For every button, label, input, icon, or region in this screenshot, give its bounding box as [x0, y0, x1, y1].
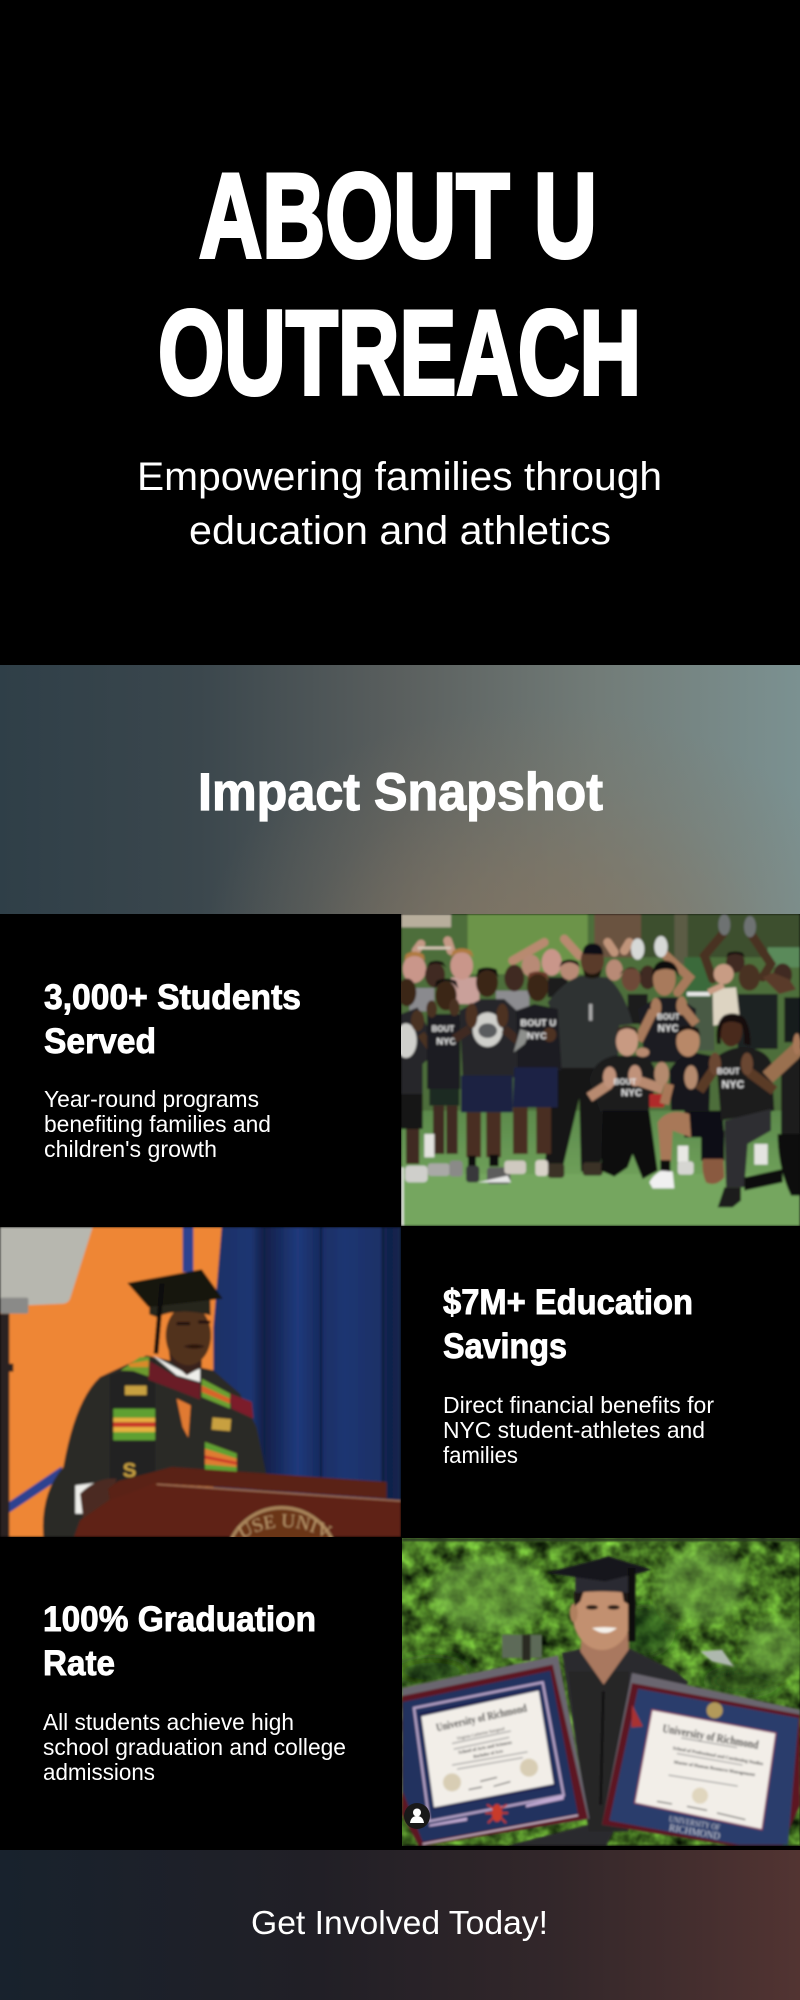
heading: graduation rate: Rate	[43, 1644, 115, 1683]
right side group	[738, 994, 778, 1049]
text: students served description: children's growth	[44, 1136, 217, 1162]
photo: team group on field: NYC	[527, 1031, 547, 1041]
panel: education savings text	[401, 1226, 800, 1538]
right diploma: UNIVERSITY OF	[668, 1813, 721, 1832]
heading: students served: 3,000+ Students	[44, 978, 301, 1017]
text: students served description: benefiting families and	[44, 1111, 271, 1137]
right diploma	[602, 1673, 800, 1846]
subtitle	[137, 455, 662, 553]
photo: team group on field: NYC	[621, 1088, 642, 1099]
subtitle: Empowering families through	[137, 455, 662, 499]
photo: team group on field: NYC	[658, 1023, 679, 1034]
front player 2	[427, 1014, 460, 1089]
title	[158, 149, 641, 420]
text: students served description: Year-round programs	[44, 1086, 259, 1112]
back row heads	[403, 949, 562, 983]
left diploma: Bachelor of Arts	[473, 1748, 504, 1759]
text: education savings description: Direct financial benefits for	[443, 1392, 714, 1418]
photo: graduate speaking at podium: S	[123, 1459, 136, 1482]
trees and field	[401, 914, 800, 1113]
text: graduation rate description: All students achieve high	[43, 1709, 294, 1735]
heading: graduation rate	[43, 1600, 316, 1683]
text: education savings description: families	[443, 1442, 518, 1468]
heading: education savings: Savings	[443, 1327, 567, 1366]
text: graduation rate description: school graduation and college	[43, 1734, 346, 1760]
hand	[75, 1483, 94, 1514]
photo: team group on field: NYC	[722, 1079, 744, 1091]
tie	[177, 1399, 191, 1438]
text: get involved: Get Involved Today!	[251, 1904, 548, 1941]
podium seal: USE UNIV	[238, 1512, 334, 1537]
text: education savings description: NYC student-athletes and	[443, 1417, 705, 1443]
right diploma: University of Richmond	[661, 1721, 760, 1752]
panel: impact snapshot band	[0, 665, 800, 914]
cap	[575, 1571, 629, 1593]
kneeling man 1	[589, 1056, 657, 1114]
left diploma: Virginia Catherine Sutrgood	[456, 1726, 506, 1741]
head	[572, 1590, 630, 1650]
photo: team group on field: BOUT U	[520, 1018, 556, 1028]
subtitle: education and athletics	[189, 509, 611, 553]
photo: team group on field	[395, 914, 800, 1226]
kneeling man 3	[716, 1047, 774, 1121]
mortarboard	[148, 1298, 212, 1318]
kente stole	[121, 1357, 149, 1376]
panel: graduation rate text	[0, 1537, 402, 1850]
podium seal	[228, 1504, 335, 1537]
tree tones	[392, 1548, 800, 1698]
right diploma: School of Professional and Continuing Studies	[672, 1746, 764, 1767]
gown	[499, 1648, 688, 1848]
neck and head	[168, 1347, 202, 1375]
icon: profile badge	[404, 1803, 430, 1829]
photo: team group on field: BOUT	[432, 1024, 454, 1033]
text: graduation rate description	[43, 1709, 346, 1785]
heading: impact snapshot: Impact Snapshot	[198, 763, 603, 822]
player centre back	[638, 997, 696, 1062]
heading: education savings	[443, 1283, 693, 1366]
hands	[402, 1741, 407, 1755]
photo: graduate with framed diplomas	[392, 1538, 800, 1848]
coach	[548, 976, 633, 1068]
text: students served description	[44, 1086, 271, 1162]
stole emblems	[125, 1386, 147, 1395]
text: education savings description	[443, 1392, 714, 1468]
front player 4	[516, 1004, 562, 1071]
kneeling man 2	[669, 1052, 711, 1111]
neck	[580, 1633, 629, 1685]
title: ABOUT U	[199, 149, 597, 283]
gloves	[631, 936, 668, 960]
photo: team group on field: BOUT	[614, 1078, 636, 1087]
panel: call to action footer	[0, 1850, 800, 2000]
left diploma: University of Richmond	[435, 1702, 529, 1734]
heading: education savings: $7M+ Education	[443, 1283, 693, 1322]
photo: team group on field: NYC	[436, 1037, 456, 1047]
raised arms back row	[416, 934, 771, 992]
heading: graduation rate: 100% Graduation	[43, 1600, 316, 1639]
photo: team group on field: BOUT	[717, 1067, 740, 1076]
hood	[148, 1360, 200, 1400]
panel: hero	[0, 0, 800, 665]
photo: team group on field: BOUT	[657, 1012, 680, 1021]
right diploma: RICHMOND	[668, 1823, 721, 1843]
left diploma	[402, 1655, 589, 1846]
right edge man	[781, 1047, 800, 1134]
photo: graduate speaking at podium	[0, 1227, 401, 1537]
gown	[43, 1355, 267, 1537]
panel: students served text	[0, 914, 401, 1226]
front player 1	[401, 1006, 429, 1096]
baby	[713, 987, 740, 1026]
heading: students served: Served	[44, 1022, 156, 1061]
text: graduation rate description: admissions	[43, 1759, 155, 1785]
podium	[108, 1467, 387, 1500]
back row bodies	[409, 988, 434, 1011]
right diploma: Master of Human Resource Management	[673, 1760, 756, 1778]
front player 3	[459, 999, 520, 1077]
heading: students served	[44, 978, 301, 1061]
left diploma: School of Arts and Sciences	[458, 1741, 513, 1756]
